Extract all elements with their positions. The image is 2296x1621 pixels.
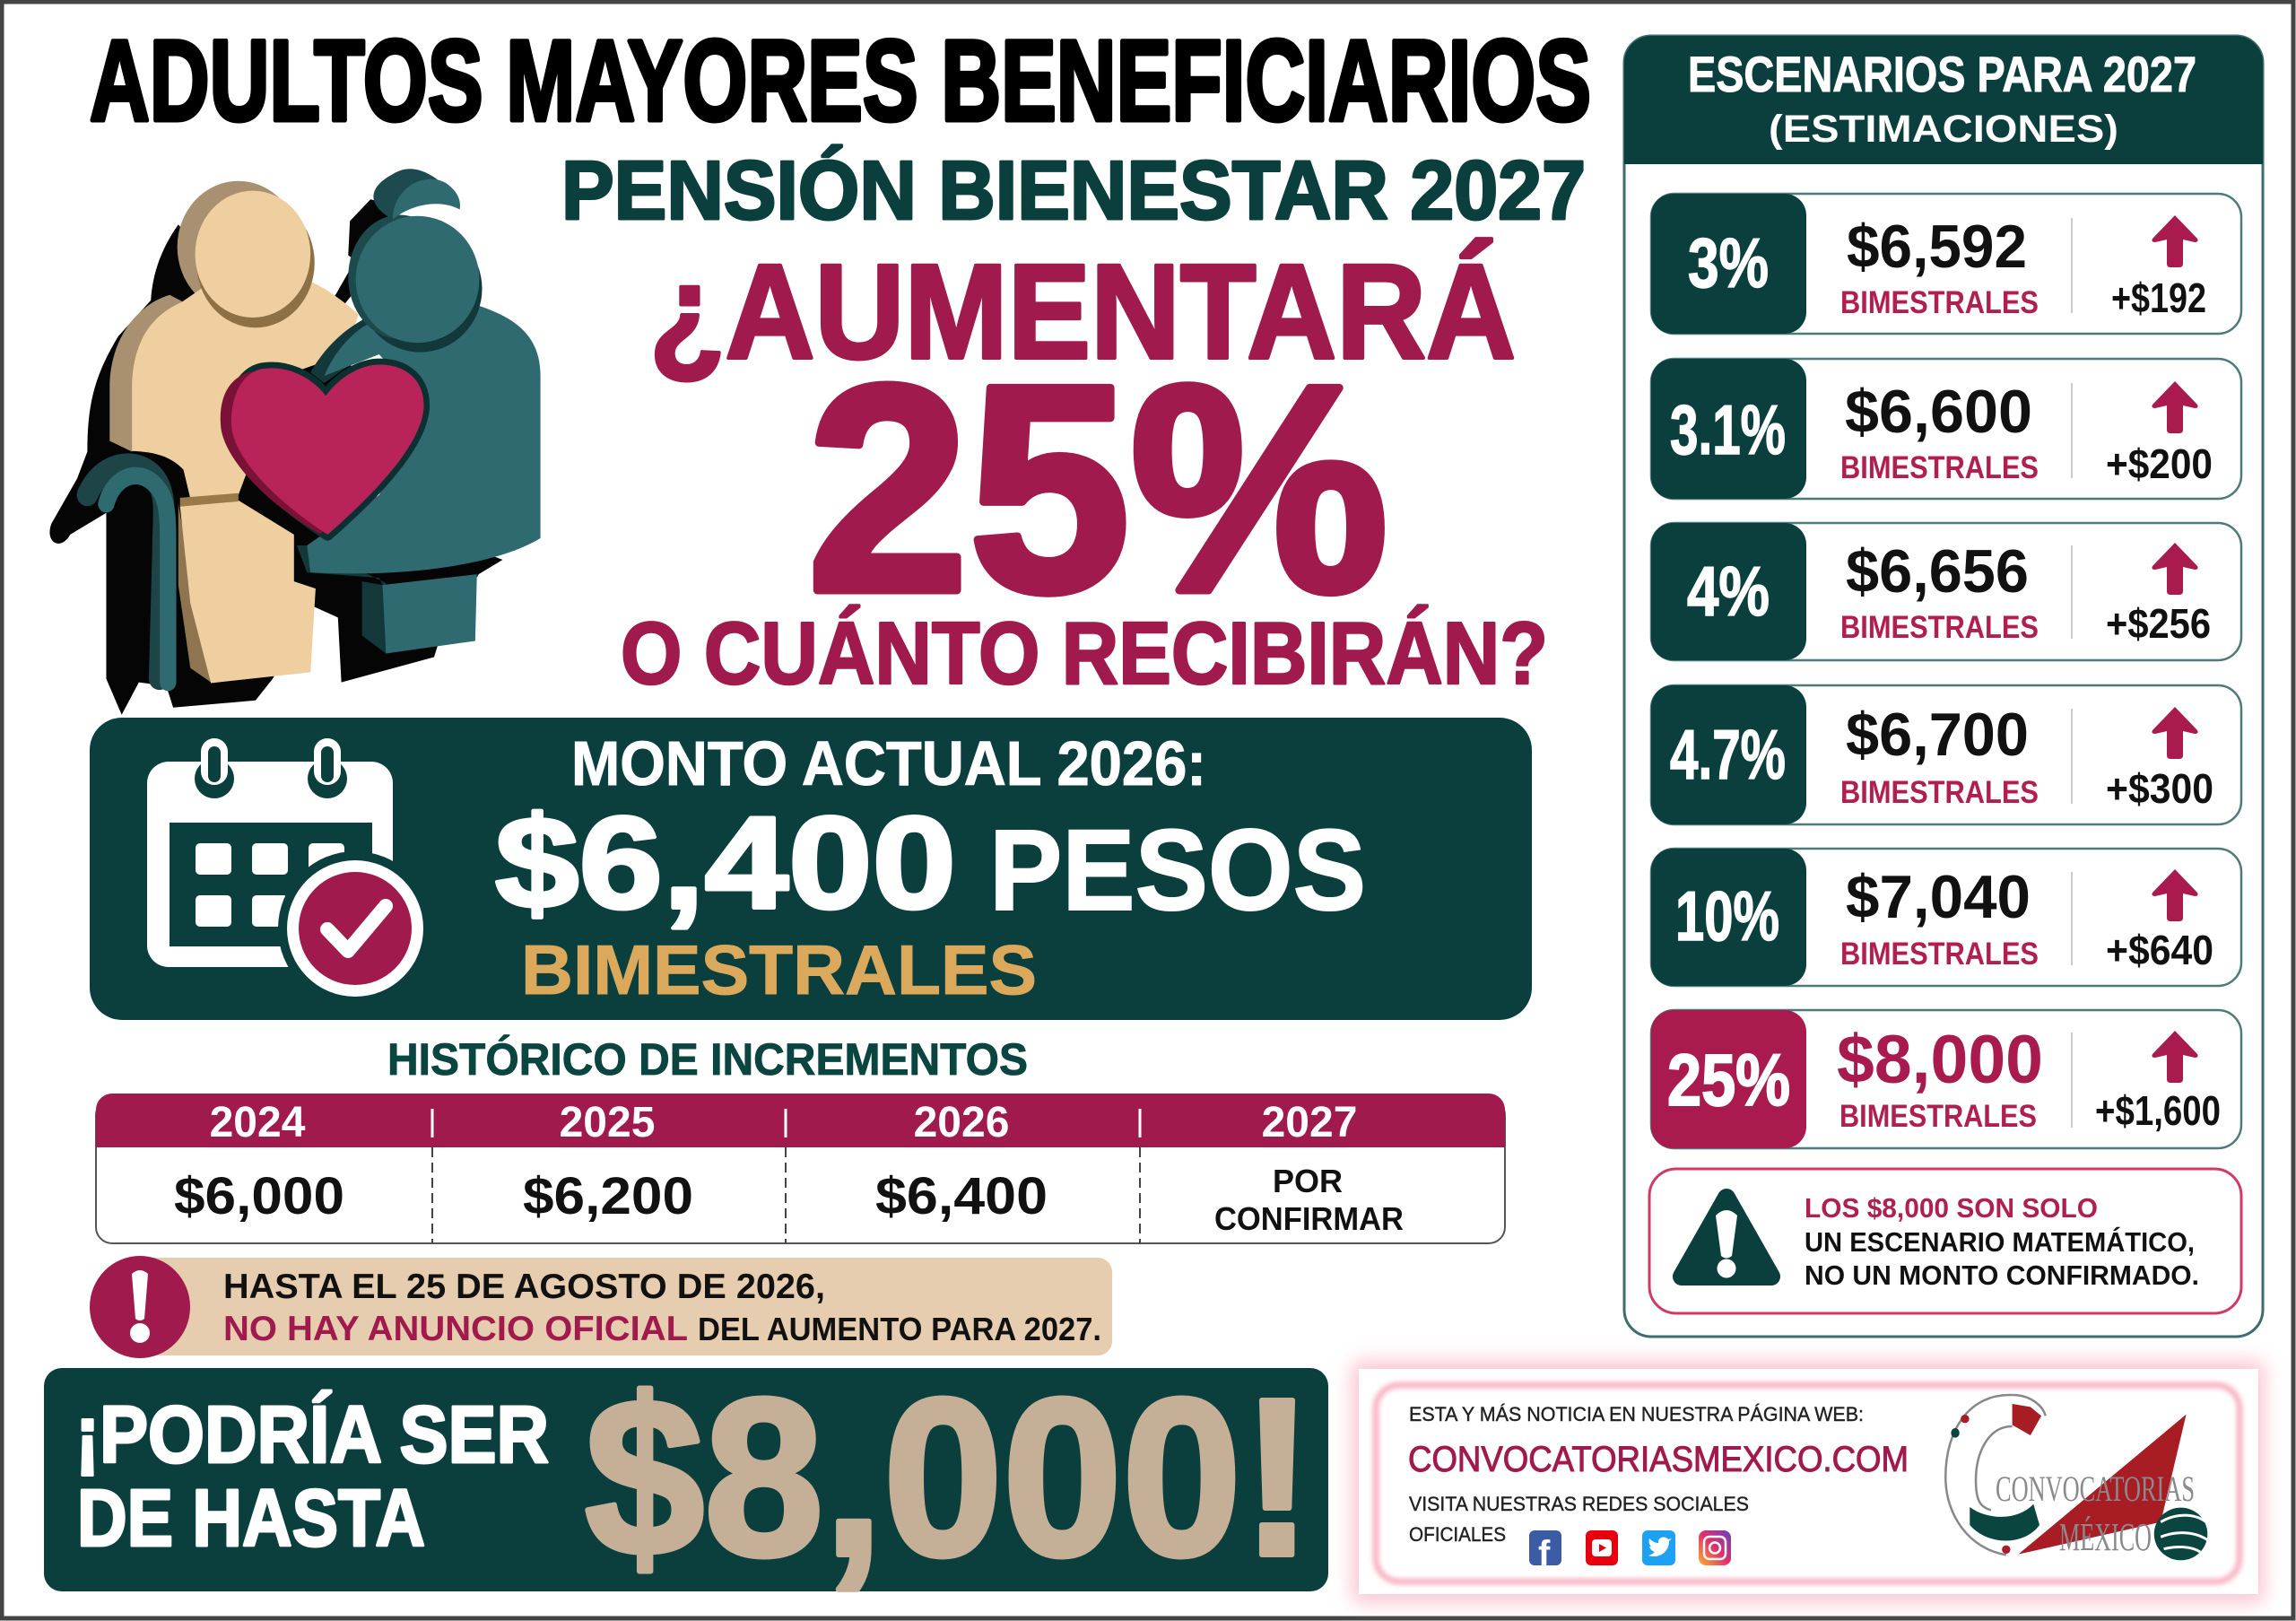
note: escenario matemático: UN ESCENARIO MATEMÁTICO, (1805, 1226, 2195, 1258)
scenario: 4.7% (1651, 685, 2241, 824)
headline: aumentará: ¿AUMENTARÁ (649, 236, 1516, 387)
man head (196, 191, 310, 318)
callout: sin anuncio oficial: NO HAY ANUNCIO OFICIAL (223, 1310, 688, 1348)
icon: warning triangle (1682, 1198, 1771, 1277)
icon: exclamation circle (90, 1256, 190, 1358)
text: bimestrales: BIMESTRALES (521, 930, 1037, 1009)
heart (231, 364, 424, 535)
text: pesos: PESOS (989, 806, 1366, 935)
text: oficiales: OFICIALES (1409, 1523, 1506, 1546)
table: histórico (96, 1094, 1505, 1243)
text: esta y más noticia: ESTA Y MÁS NOTICIA EN NUESTRA PÁGINA WEB: (1409, 1403, 1864, 1425)
scenario: 4.7%: $6,700 (1846, 701, 2029, 769)
scenario: 4%: +$256 (2106, 600, 2211, 647)
scenario: 3.1%: BIMESTRALES (1840, 450, 2039, 485)
scenario: 3.1%: 3.1% (1670, 390, 1786, 469)
woman head (359, 225, 483, 353)
table headers: years: 2024 (210, 1099, 306, 1146)
man neck shadow (196, 198, 315, 327)
scenario: 4%: $6,656 (1846, 537, 2029, 606)
text: podría ser: ¡PODRÍA SER (75, 1390, 549, 1480)
scenario: 3%: $6,592 (1847, 213, 2027, 281)
illustration: elderly couple with heart and cane (49, 169, 541, 715)
panel: escenarios para 2027 (1624, 36, 2263, 1337)
note text: LOS $8,000 SON SOLO (1805, 1192, 2098, 1224)
logo: convocatorias méxico: CONVOCATORIAS (1996, 1468, 2195, 1509)
table values (174, 1163, 1404, 1237)
scenario: 10%: $7,040 (1846, 863, 2031, 931)
panel header: ESCENARIOS PARA 2027 (1688, 46, 2196, 102)
headline: o cuánto recibirán: O CUÁNTO RECIBIRÁN? (621, 604, 1548, 702)
scenario: 3% (1651, 194, 2241, 334)
icon: youtube (1586, 1530, 1618, 1565)
scenario: 3%: BIMESTRALES (1840, 285, 2039, 320)
logo red triangle (2018, 1415, 2187, 1555)
scenario: 3.1% (1651, 359, 2241, 499)
panel: sitio web y redes (1352, 1362, 2264, 1602)
scenario: 25% highlighted: $8,000 (1837, 1022, 2043, 1098)
scenario: 4.7%: BIMESTRALES (1840, 775, 2039, 810)
panel header: (ESTIMACIONES) (1769, 108, 2118, 151)
man body (132, 261, 359, 499)
scenario: 25% highlighted: +$1,600 (2095, 1087, 2221, 1134)
table values: $6,400 (875, 1167, 1048, 1225)
scenario: 4% (1651, 523, 2241, 660)
logo: convocatorias méxico (1945, 1395, 2207, 1560)
callout: sin anuncio oficial: DEL AUMENTO PARA 2027. (698, 1311, 1101, 1347)
scenario: 10%: 10% (1675, 876, 1779, 955)
callout text: HASTA EL 25 DE AGOSTO DE 2026, (223, 1268, 825, 1306)
icon: calendar with check (147, 738, 432, 1006)
scenario: 25% highlighted: BIMESTRALES (1839, 1099, 2037, 1134)
black cast shadow (49, 199, 502, 715)
table values: CONFIRMAR (1214, 1200, 1404, 1237)
table headers: years (210, 1099, 1357, 1146)
cane (87, 465, 164, 679)
woman body extrusion (297, 318, 386, 654)
scenario: 25% highlighted: 25% (1667, 1040, 1790, 1121)
panel header (1624, 36, 2263, 164)
icon: facebook (1529, 1530, 1561, 1573)
scenario: 10%: +$640 (2106, 927, 2213, 973)
logo: convocatorias méxico: MÉXICO (2059, 1515, 2152, 1559)
note: escenario matemático (1649, 1169, 2241, 1313)
scenario: 3.1%: $6,600 (1845, 378, 2032, 446)
panel: monto actual (90, 718, 1532, 1020)
scenario: 3%: 3% (1688, 223, 1769, 302)
headline: 25%: 25% (807, 324, 1388, 653)
scenario: 4%: 4% (1687, 552, 1770, 631)
table headers: years: 2027 (1262, 1099, 1357, 1146)
icon: instagram (1699, 1530, 1731, 1565)
man body extrusion (109, 295, 222, 451)
text: de hasta: DE HASTA (77, 1474, 425, 1564)
icon: twitter (1642, 1530, 1675, 1565)
scenario: 3%: +$192 (2111, 275, 2206, 321)
text: 8,000 amount: $8,000! (585, 1352, 1313, 1602)
woman body (307, 279, 541, 573)
scenario: 10% (1651, 849, 2241, 986)
table headers: years: 2025 (560, 1099, 655, 1146)
scenario: 4.7%: 4.7% (1670, 715, 1786, 794)
scenario: 25% highlighted (1651, 1010, 2241, 1148)
table values: $6,200 (523, 1167, 693, 1225)
heading: histórico de incrementos: HISTÓRICO DE INCREMENTOS (387, 1034, 1028, 1085)
callout: sin anuncio oficial (90, 1256, 1112, 1358)
text: monto actual 2026: MONTO ACTUAL 2026: (571, 728, 1206, 798)
logo C ring (1945, 1395, 2046, 1555)
scenario: 10%: BIMESTRALES (1840, 937, 2039, 972)
table headers: years: 2026 (914, 1099, 1009, 1146)
subtitle: Pensión Bienestar 2027: PENSIÓN BIENESTAR 2027 (561, 144, 1586, 237)
icon: facebook: f (1538, 1534, 1551, 1573)
text: website url: CONVOCATORIASMEXICO.COM (1408, 1440, 1909, 1479)
woman skirt (383, 574, 477, 654)
scenario: 4%: BIMESTRALES (1840, 610, 2039, 645)
text: visita redes: VISITA NUESTRAS REDES SOCIALES (1409, 1493, 1749, 1515)
scenario: 4.7%: +$300 (2106, 765, 2213, 812)
table values: POR (1273, 1163, 1343, 1199)
title: ADULTOS MAYORES BENEFICIARIOS (90, 17, 1591, 145)
text: 6,400 amount: $6,400 (495, 789, 956, 936)
woman hair bun (373, 169, 444, 219)
table values: $6,000 (174, 1167, 344, 1225)
panel: podría ser de hasta 8,000 (44, 1352, 1328, 1602)
scenario: 3.1%: +$200 (2106, 440, 2213, 487)
note: escenario matemático: NO UN MONTO CONFIRMADO. (1805, 1259, 2199, 1291)
